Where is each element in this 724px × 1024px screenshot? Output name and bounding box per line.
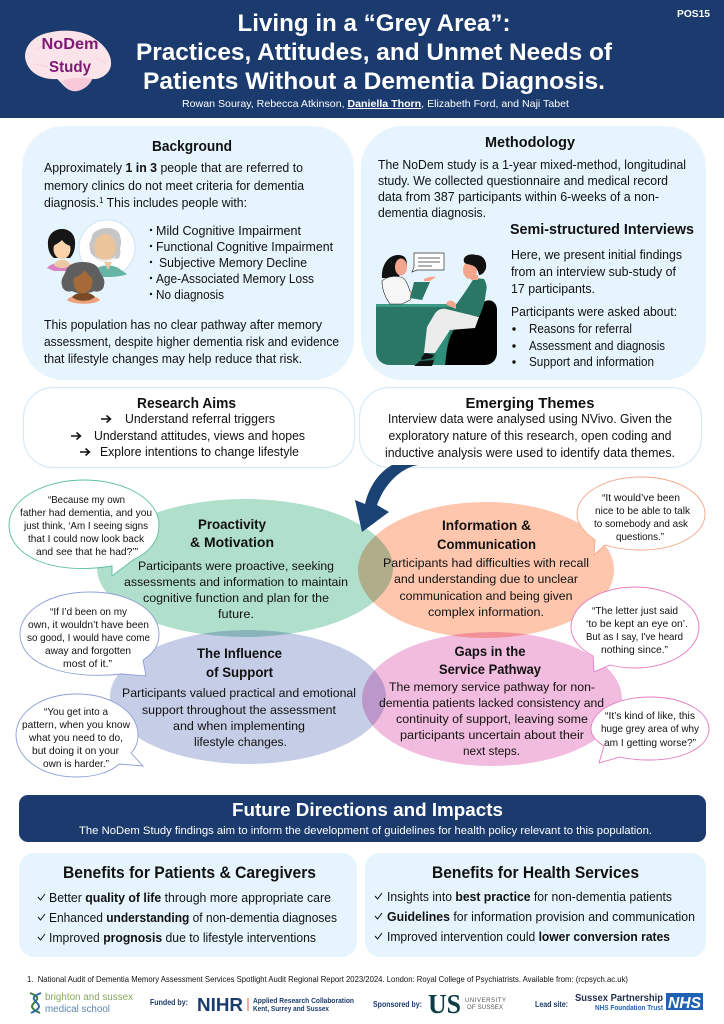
panel: benefits for patients and caregivers: Benefits for Patients & Caregivers [63, 864, 316, 882]
title: Living in a “Grey Area”: [238, 10, 510, 37]
text: influence of support [122, 646, 356, 749]
logo: NoDem brain: NoDem [42, 36, 98, 53]
quote bubble: on my own: away and forgotten [45, 646, 131, 657]
list: patient benefits: Better quality of life through more appropriate care [49, 891, 331, 905]
list: patient groups [150, 224, 333, 302]
logo: lead site Sussex Partnership NHS: NHS Foundation Trust [595, 1005, 664, 1012]
text: influence of support: of Support [206, 665, 273, 680]
quote bubble: on my own: most of it.” [63, 659, 113, 670]
text: influence of support: The Influence [197, 646, 282, 661]
text: proactivity: & Motivation [190, 535, 274, 550]
heading: semi-structured interviews: Semi-structured Interviews [510, 221, 694, 238]
quote bubble: into a pattern: own is harder.” [43, 759, 110, 770]
list: service benefits: Insights into best practice for non-dementia patients [387, 890, 672, 904]
list: service benefits: Improved intervention could lower conversion rates [387, 930, 670, 944]
quote bubble: father had dementia: just think, ‘Am I seeing signs [23, 521, 148, 532]
arrow: themes flow [355, 465, 418, 532]
panel: benefits for health services [365, 853, 706, 957]
logo: sponsored by University of Sussex: UNIVERSITY [465, 998, 506, 1004]
text: influence of support: and when implementing [173, 719, 305, 733]
aim 2: Understand attitudes, views and hopes [94, 429, 305, 443]
aim 3: Explore intentions to change lifestyle [100, 445, 299, 459]
text: information and communication: and understanding due to unclear [394, 572, 578, 586]
intro text: This includes people with: [104, 196, 247, 210]
emerging themes text: exploratory nature of this research, open coding and [388, 429, 672, 443]
text: proactivity: Participants were proactive, seeking [138, 559, 334, 573]
closing text: This population has no clear pathway after memory [44, 318, 323, 332]
logo: brighton and sussex medical school: brighton and sussex [45, 992, 133, 1003]
quote bubble: talk to somebody: “It would’ve been [602, 493, 680, 504]
banner: future directions: Future Directions and Impacts [232, 800, 503, 820]
text: information and communication: complex information. [428, 605, 544, 619]
theme: information and communication [358, 502, 614, 638]
closing text [44, 318, 339, 366]
logo: sponsored by University of Sussex: OF SUSSEX [467, 1005, 503, 1011]
quote bubble: into a pattern: pattern, when you know [22, 720, 130, 731]
heading: background: Background [152, 138, 232, 155]
text: influence of support: support throughout the assessment [142, 703, 337, 717]
list: patient benefits: Improved prognosis due to lifestyle interventions [49, 931, 316, 945]
quote bubble: on my own: own, it wouldn’t have been [28, 620, 149, 631]
methodology text: The NoDem study is a 1-year mixed-method, longitudinal [378, 158, 686, 172]
quote bubble: kept an eye on: nothing since.” [601, 645, 669, 656]
methodology text: data from 387 participants within 6-weeks of a non- [378, 190, 659, 204]
intro text: Approximately 1 in 3 people that are referred to [44, 161, 303, 175]
logo: sponsored by University of Sussex [373, 989, 506, 1019]
text: gaps in the service pathway [379, 644, 604, 758]
logo: lead site Sussex Partnership NHS [535, 993, 703, 1012]
emerging themes text: inductive analysis were used to identify data themes. [385, 446, 675, 460]
interview description [511, 248, 682, 369]
poster number: POS15 [677, 9, 710, 20]
heading: emerging themes: Emerging Themes [466, 395, 594, 412]
list: patient groups: Subjective Memory Decline [159, 256, 307, 270]
logo: lead site Sussex Partnership NHS: Sussex Partnership [575, 993, 663, 1004]
list: patient benefits [38, 891, 337, 945]
quote bubble: kept an eye on: “The letter just said [592, 606, 678, 617]
quote bubble: grey area: huge grey area of why [601, 724, 700, 735]
text: information and communication: communication and being given [400, 589, 573, 603]
title [136, 10, 613, 95]
quote bubble: on my own: “If I’d been on my [50, 607, 128, 618]
quote bubble: on my own: so good, I would have come [27, 633, 150, 644]
quote bubble: grey area: am I getting worse?” [604, 738, 697, 749]
logo: sponsored by University of Sussex: Sponsored by: [373, 999, 422, 1009]
list: patient groups: Functional Cognitive Impairment [156, 240, 333, 254]
text: gaps in the service pathway: dementia patients lacked consistency and [379, 696, 604, 710]
list: patient benefits: Enhanced understanding of non-dementia diagnoses [49, 911, 337, 925]
aim 1: Understand referral triggers [125, 412, 275, 426]
interview description: Support and information [529, 355, 654, 369]
logo: NoDem brain [25, 31, 111, 91]
intro text: memory clinics do not meet criteria for dementia [44, 179, 304, 193]
panel: background [22, 126, 354, 380]
interview description: 17 participants. [511, 282, 595, 296]
logo: sponsored by University of Sussex: US [428, 989, 461, 1019]
methodology text: dementia diagnosis. [378, 206, 486, 220]
closing text: assessment, despite higher dementia risk and evidence [44, 335, 339, 349]
quote bubble: into a pattern: but doing it on your [32, 746, 120, 757]
methodology text [378, 158, 686, 220]
intro text: diagnosis. [44, 196, 101, 210]
logo: brighton and sussex medical school: medical school [45, 1004, 110, 1015]
text: proactivity [124, 517, 348, 621]
panel: methodology [361, 126, 706, 380]
intro text: 1 [99, 196, 104, 205]
text: proactivity: cognitive function and plan for the [143, 591, 329, 605]
illustration: clinician and patient [376, 253, 497, 366]
interview description: Reasons for referral [529, 322, 632, 336]
closing text: that lifestyle changes may help reduce that risk. [44, 352, 302, 366]
panel: benefits for patients and caregivers [19, 853, 357, 957]
heading: research aims: Research Aims [137, 395, 236, 412]
logo: funded by NIHR: NIHR [197, 995, 243, 1015]
title: Practices, Attitudes, and Unmet Needs of [136, 39, 613, 66]
quote bubble: kept an eye on: ‘to be kept an eye on’. [586, 619, 688, 630]
interview description: from an interview sub-study of [511, 265, 676, 279]
emerging themes text: Interview data were analysed using NVivo. Given the [388, 412, 672, 426]
panel: emerging themes [360, 388, 702, 468]
panel: research aims [24, 388, 354, 468]
icon: three people [47, 220, 135, 304]
methodology text: study. We collected questionnaire and medical record [378, 174, 668, 188]
text: information and communication: Information & [442, 518, 531, 533]
text: proactivity: assessments and information to maintain [124, 575, 348, 589]
quote bubble: into a pattern: “You get into a [44, 707, 108, 718]
banner: future directions [19, 795, 706, 842]
list: patient groups: No diagnosis [156, 288, 224, 302]
intro text [44, 161, 304, 210]
logo: funded by NIHR: Kent, Surrey and Sussex [253, 1006, 329, 1013]
quote bubble: father had dementia: father had dementia, and you [20, 508, 152, 519]
quote bubble: grey area [591, 697, 709, 763]
logo: funded by NIHR: Funded by: [150, 997, 188, 1007]
text: gaps in the service pathway: Gaps in the [454, 644, 526, 659]
text: influence of support: Participants valued practical and emotional [122, 686, 356, 700]
logo: funded by NIHR [150, 995, 354, 1015]
text: gaps in the service pathway: Service Pathway [439, 662, 541, 677]
text: influence of support: lifestyle changes. [194, 735, 287, 749]
logo: brighton and sussex medical school [30, 992, 133, 1015]
quote bubble: talk to somebody: questions.” [616, 532, 665, 543]
quote bubble: talk to somebody: to somebody and ask [594, 519, 689, 530]
text: gaps in the service pathway: next steps. [463, 744, 520, 758]
logo: lead site Sussex Partnership NHS: NHS [668, 995, 701, 1012]
interview description: Here, we present initial findings [511, 248, 682, 262]
banner: future directions: The NoDem Study findings aim to inform the development of guidelines for health policy relevant to this population. [79, 825, 652, 837]
list: patient groups: Age-Associated Memory Loss [156, 272, 314, 286]
footnote: 1. National Audit of Dementia Memory Assessment Services Spotlight Audit Regional Report 2023/2024. London: Royal College of Psychiatrists. Available from: (rcpsych.ac.uk) [27, 974, 628, 984]
text: gaps in the service pathway: continuity of support, leaving some [396, 712, 588, 726]
emerging themes text [385, 412, 675, 460]
quote bubble: father had dementia: “Because my own [48, 495, 125, 506]
text: information and communication: Communication [437, 537, 536, 552]
text: gaps in the service pathway: The memory service pathway for non- [389, 680, 595, 694]
quote bubble: kept an eye on [571, 587, 699, 672]
panel: benefits for health services: Benefits for Health Services [432, 864, 639, 882]
authors: Rowan Souray, Rebecca Atkinson, Daniella Thorn , Elizabeth Ford, and Naji Tabet [182, 99, 569, 110]
list: patient groups: Mild Cognitive Impairment [156, 224, 301, 238]
quote bubble: father had dementia [9, 480, 159, 576]
quote bubble: on my own [20, 592, 159, 676]
quote bubble: into a pattern [16, 694, 143, 777]
quote bubble: talk to somebody [577, 477, 705, 555]
header banner [0, 0, 724, 118]
text: information and communication: Participants had difficulties with recall [383, 556, 589, 570]
list: service benefits: Guidelines for information provision and communication [387, 910, 695, 924]
title: Patients Without a Dementia Diagnosis. [143, 68, 605, 95]
theme: the influence of support [110, 630, 386, 764]
logo: NoDem brain: Study [49, 59, 91, 76]
interview description: Assessment and diagnosis [529, 339, 665, 353]
list: service benefits [375, 890, 695, 944]
theme: gaps in the service pathway [362, 632, 622, 766]
quote bubble: kept an eye on: But as I say, I've heard [586, 632, 683, 643]
quote bubble: grey area: “It’s kind of like, this [605, 711, 695, 722]
text: proactivity: Proactivity [198, 517, 266, 532]
quote bubble: talk to somebody: nice to be able to talk [595, 506, 691, 517]
logo: funded by NIHR: Applied Research Collaboration [253, 998, 354, 1005]
text: proactivity: future. [218, 607, 254, 621]
interview description: Participants were asked about: [511, 305, 677, 319]
theme: proactivity and motivation [97, 499, 393, 637]
logo: lead site Sussex Partnership NHS: Lead site: [535, 999, 568, 1009]
quote bubble: father had dementia: that I could now look back [28, 534, 145, 545]
quote bubble: into a pattern: what you need to do, [28, 733, 123, 744]
text: information and communication [383, 518, 589, 619]
heading: methodology: Methodology [485, 134, 576, 151]
text: gaps in the service pathway: participants uncertain about their [400, 728, 584, 742]
quote bubble: father had dementia: and see that he had?’” [36, 547, 139, 558]
